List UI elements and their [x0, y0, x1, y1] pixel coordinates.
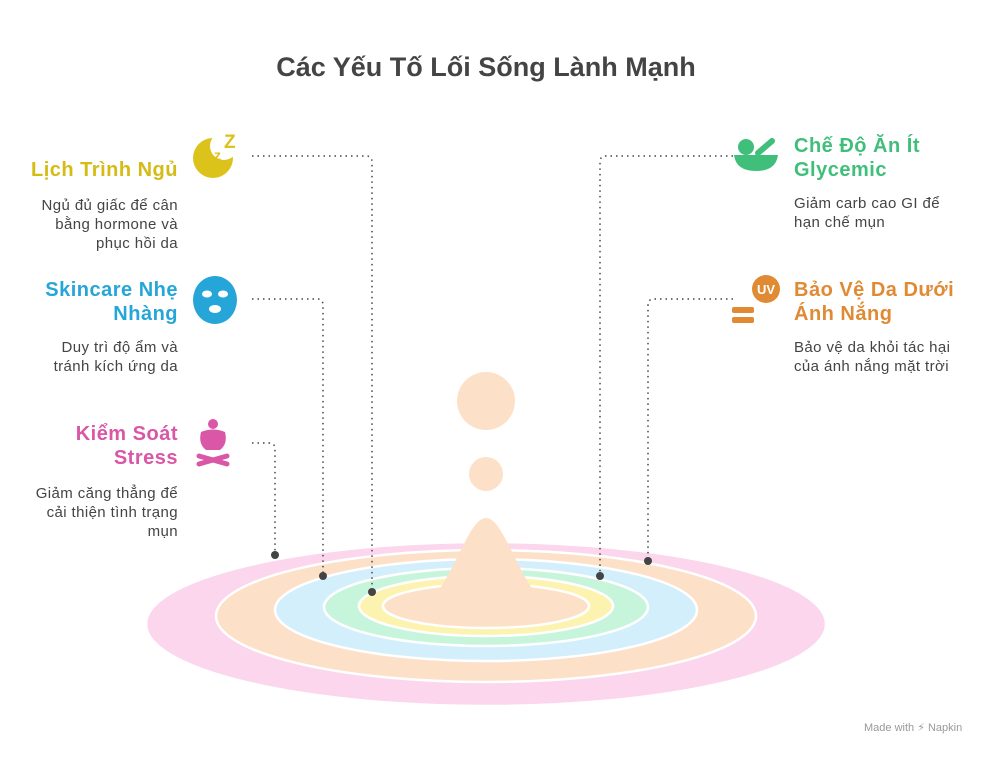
- text: sleep: bằng hormone và: [55, 216, 178, 233]
- heading: sun protection: Bảo Vệ Da Dưới: [794, 279, 954, 301]
- text: sleep: phục hồi da: [96, 235, 178, 252]
- heading: skincare: Nhàng: [113, 303, 178, 325]
- icon: UV: UV: [757, 282, 775, 297]
- icon: moon zzz: z: [214, 147, 221, 163]
- heading: stress: [76, 423, 178, 469]
- text: sleep: [42, 197, 178, 252]
- ripple ellipses: [146, 542, 826, 706]
- text: skincare: [54, 339, 178, 375]
- heading: sun protection: Ánh Nắng: [794, 303, 892, 325]
- connectors: [252, 156, 733, 592]
- heading: sleep: Lịch Trình Ngủ: [31, 159, 178, 181]
- text: skincare: tránh kích ứng da: [54, 358, 178, 375]
- text: stress: cải thiện tình trạng: [47, 504, 178, 521]
- heading: diet: Chế Độ Ăn Ít: [794, 135, 920, 157]
- title: Các Yếu Tố Lối Sống Lành Mạnh: [276, 52, 696, 82]
- text: sun protection: [794, 339, 950, 375]
- text: sleep: Ngủ đủ giấc để cân: [42, 197, 178, 214]
- icon: meditation: [196, 419, 230, 466]
- heading: skincare: [45, 279, 178, 325]
- text: stress: Giảm căng thẳng để: [36, 485, 178, 502]
- heading: sun protection: [794, 279, 954, 325]
- heading: diet: Glycemic: [794, 159, 887, 181]
- icon: salad bowl: [734, 138, 778, 171]
- icon: UV: [732, 275, 780, 323]
- text: stress: mụn: [148, 523, 178, 540]
- drop splash: [420, 518, 552, 606]
- heading: diet: [794, 134, 920, 181]
- heading: stress: Stress: [114, 447, 178, 469]
- text: stress: [36, 484, 178, 540]
- icon: moon zzz: Z: [224, 132, 236, 153]
- footer credit: Made with ⚡ Napkin: [864, 722, 962, 734]
- text: diet: [794, 195, 940, 231]
- icon: mask: [193, 276, 237, 324]
- heading: skincare: Skincare Nhẹ: [45, 279, 178, 301]
- heading: stress: Kiểm Soát: [76, 423, 178, 445]
- drops: [457, 372, 515, 430]
- text: sun protection: Bảo vệ da khỏi tác hại: [794, 339, 950, 356]
- text: diet: Giảm carb cao GI để: [794, 195, 940, 212]
- text: sun protection: của ánh nắng mặt trời: [794, 358, 949, 375]
- text: diet: hạn chế mụn: [794, 214, 885, 231]
- icon: moon zzz: [193, 132, 236, 178]
- text: skincare: Duy trì độ ẩm và: [62, 339, 178, 356]
